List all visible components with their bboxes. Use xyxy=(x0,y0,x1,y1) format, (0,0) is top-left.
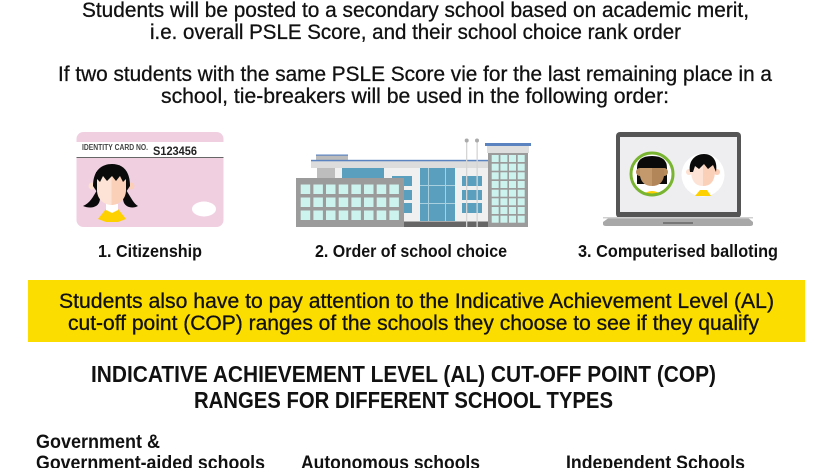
tie-breaker intro text xyxy=(58,63,772,108)
label: computerised balloting: 3. Computerised balloting xyxy=(578,241,778,261)
intro text: i.e. overall PSLE Score, and their school choice rank order xyxy=(150,21,681,44)
heading: COP ranges: INDICATIVE ACHIEVEMENT LEVEL (AL) CUT-OFF POINT (COP) xyxy=(91,361,716,387)
label: order of school choice: 2. Order of school choice xyxy=(315,241,507,261)
tie-breaker intro text: school, tie-breakers will be used in the following order: xyxy=(161,85,669,108)
icon: identity card: S123456 xyxy=(153,146,197,158)
icon: laptop with two students xyxy=(603,132,753,226)
label: citizenship: 1. Citizenship xyxy=(98,241,202,261)
column heading: government schools xyxy=(36,432,265,468)
icon: identity card: IDENTITY CARD NO. xyxy=(82,143,148,152)
intro text xyxy=(82,0,749,44)
tie-breaker intro text: If two students with the same PSLE Score vie for the last remaining place in a xyxy=(58,63,772,86)
heading: COP ranges xyxy=(91,361,716,413)
heading: COP ranges: RANGES FOR DIFFERENT SCHOOL TYPES xyxy=(194,387,613,413)
callout: yellow banner xyxy=(28,280,805,342)
callout: yellow banner: Students also have to pay attention to the Indicative Achievement Level (AL) xyxy=(59,290,774,313)
column heading: government schools: Government & xyxy=(36,432,160,453)
callout: yellow banner: cut-off point (COP) ranges of the schools they choose to see if they qualify xyxy=(68,312,759,335)
icon: identity card xyxy=(76,132,224,227)
icon: school building xyxy=(296,138,531,227)
